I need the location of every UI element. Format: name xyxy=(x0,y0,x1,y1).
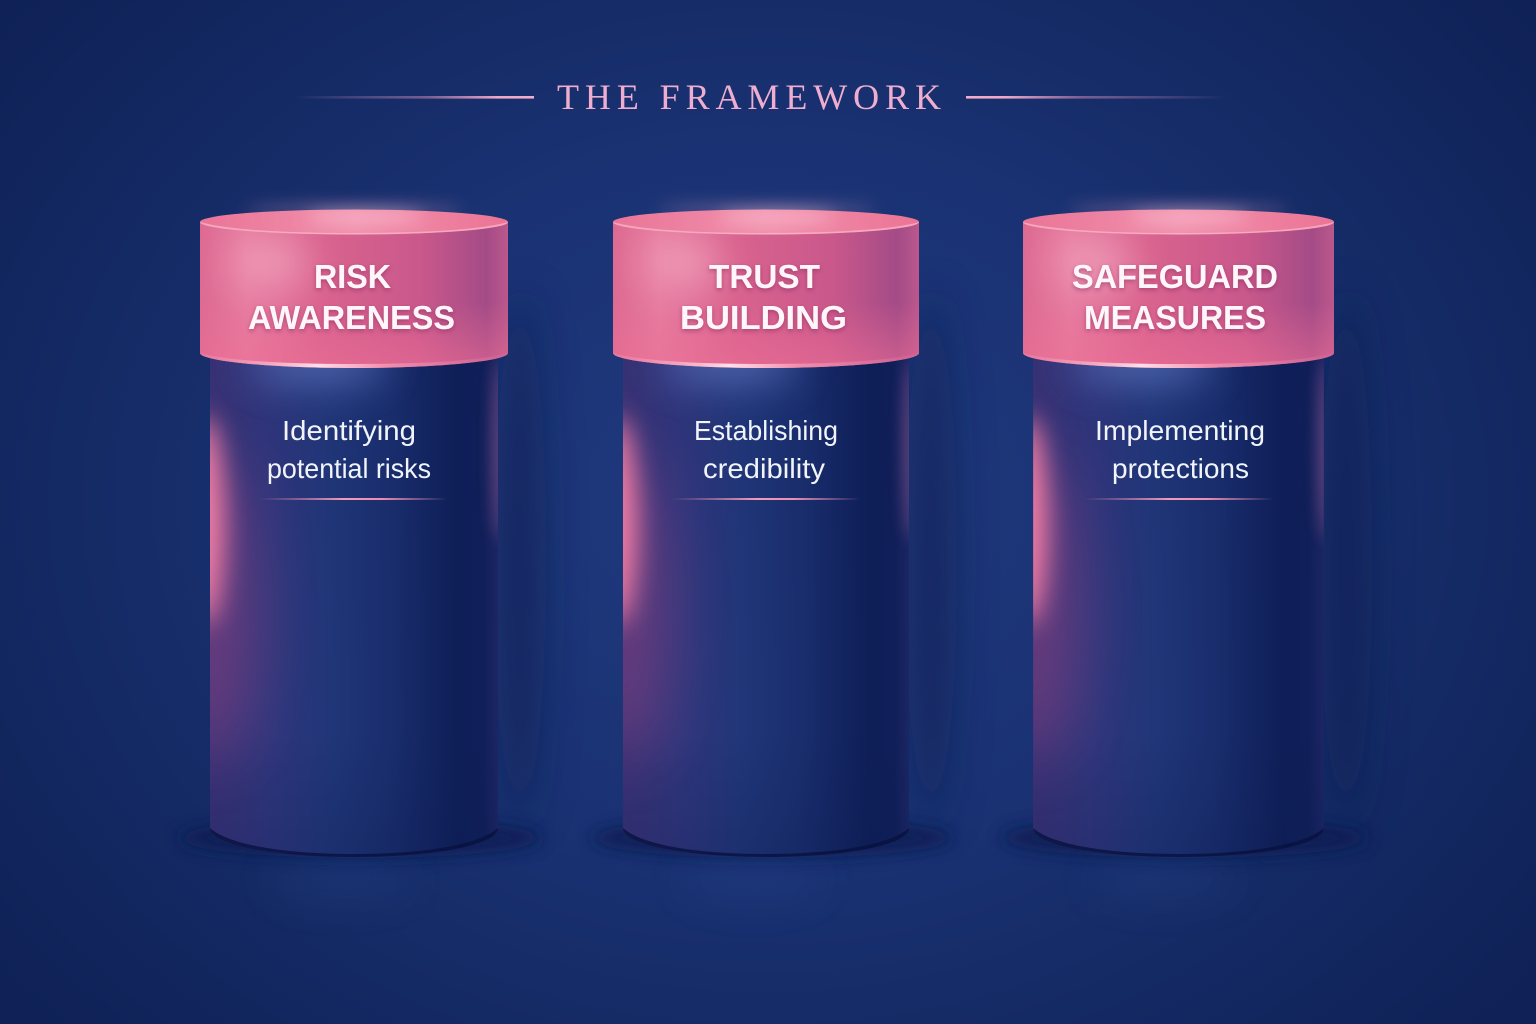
pillar: safeguard measures xyxy=(991,205,1372,898)
pillar 2 description: Establishing xyxy=(694,415,838,446)
pillar 2 cylinder xyxy=(581,205,957,898)
pillar 2 title xyxy=(680,258,847,336)
pillar 1 description: potential risks xyxy=(267,453,431,484)
pillar 1 title xyxy=(248,258,455,336)
pillar 3 description: protections xyxy=(1112,453,1249,484)
pillar: risk awareness xyxy=(168,205,546,898)
pillar 3 title: MEASURES xyxy=(1084,299,1266,336)
pillar 2 title: BUILDING xyxy=(680,299,847,336)
pillar 3 cylinder xyxy=(991,205,1372,898)
pillar 3 description: Implementing xyxy=(1095,415,1265,446)
pillar 2 title: TRUST xyxy=(709,258,820,295)
pillar 2 description xyxy=(672,415,860,500)
pillar 3 description xyxy=(1085,415,1273,500)
pillar 3 title: SAFEGUARD xyxy=(1072,258,1278,295)
pillar 3 title xyxy=(1072,258,1278,336)
pillar: trust building xyxy=(581,205,957,898)
pillar 1 cylinder xyxy=(168,205,546,898)
heading: the framework: THE FRAMEWORK xyxy=(557,77,941,117)
pillar 1 description: Identifying xyxy=(282,415,416,446)
pillar 1 title: RISK xyxy=(314,258,391,295)
pillar 2 description: credibility xyxy=(703,453,825,484)
pillar 1 title: AWARENESS xyxy=(248,299,455,336)
pillar 1 description xyxy=(260,415,447,500)
